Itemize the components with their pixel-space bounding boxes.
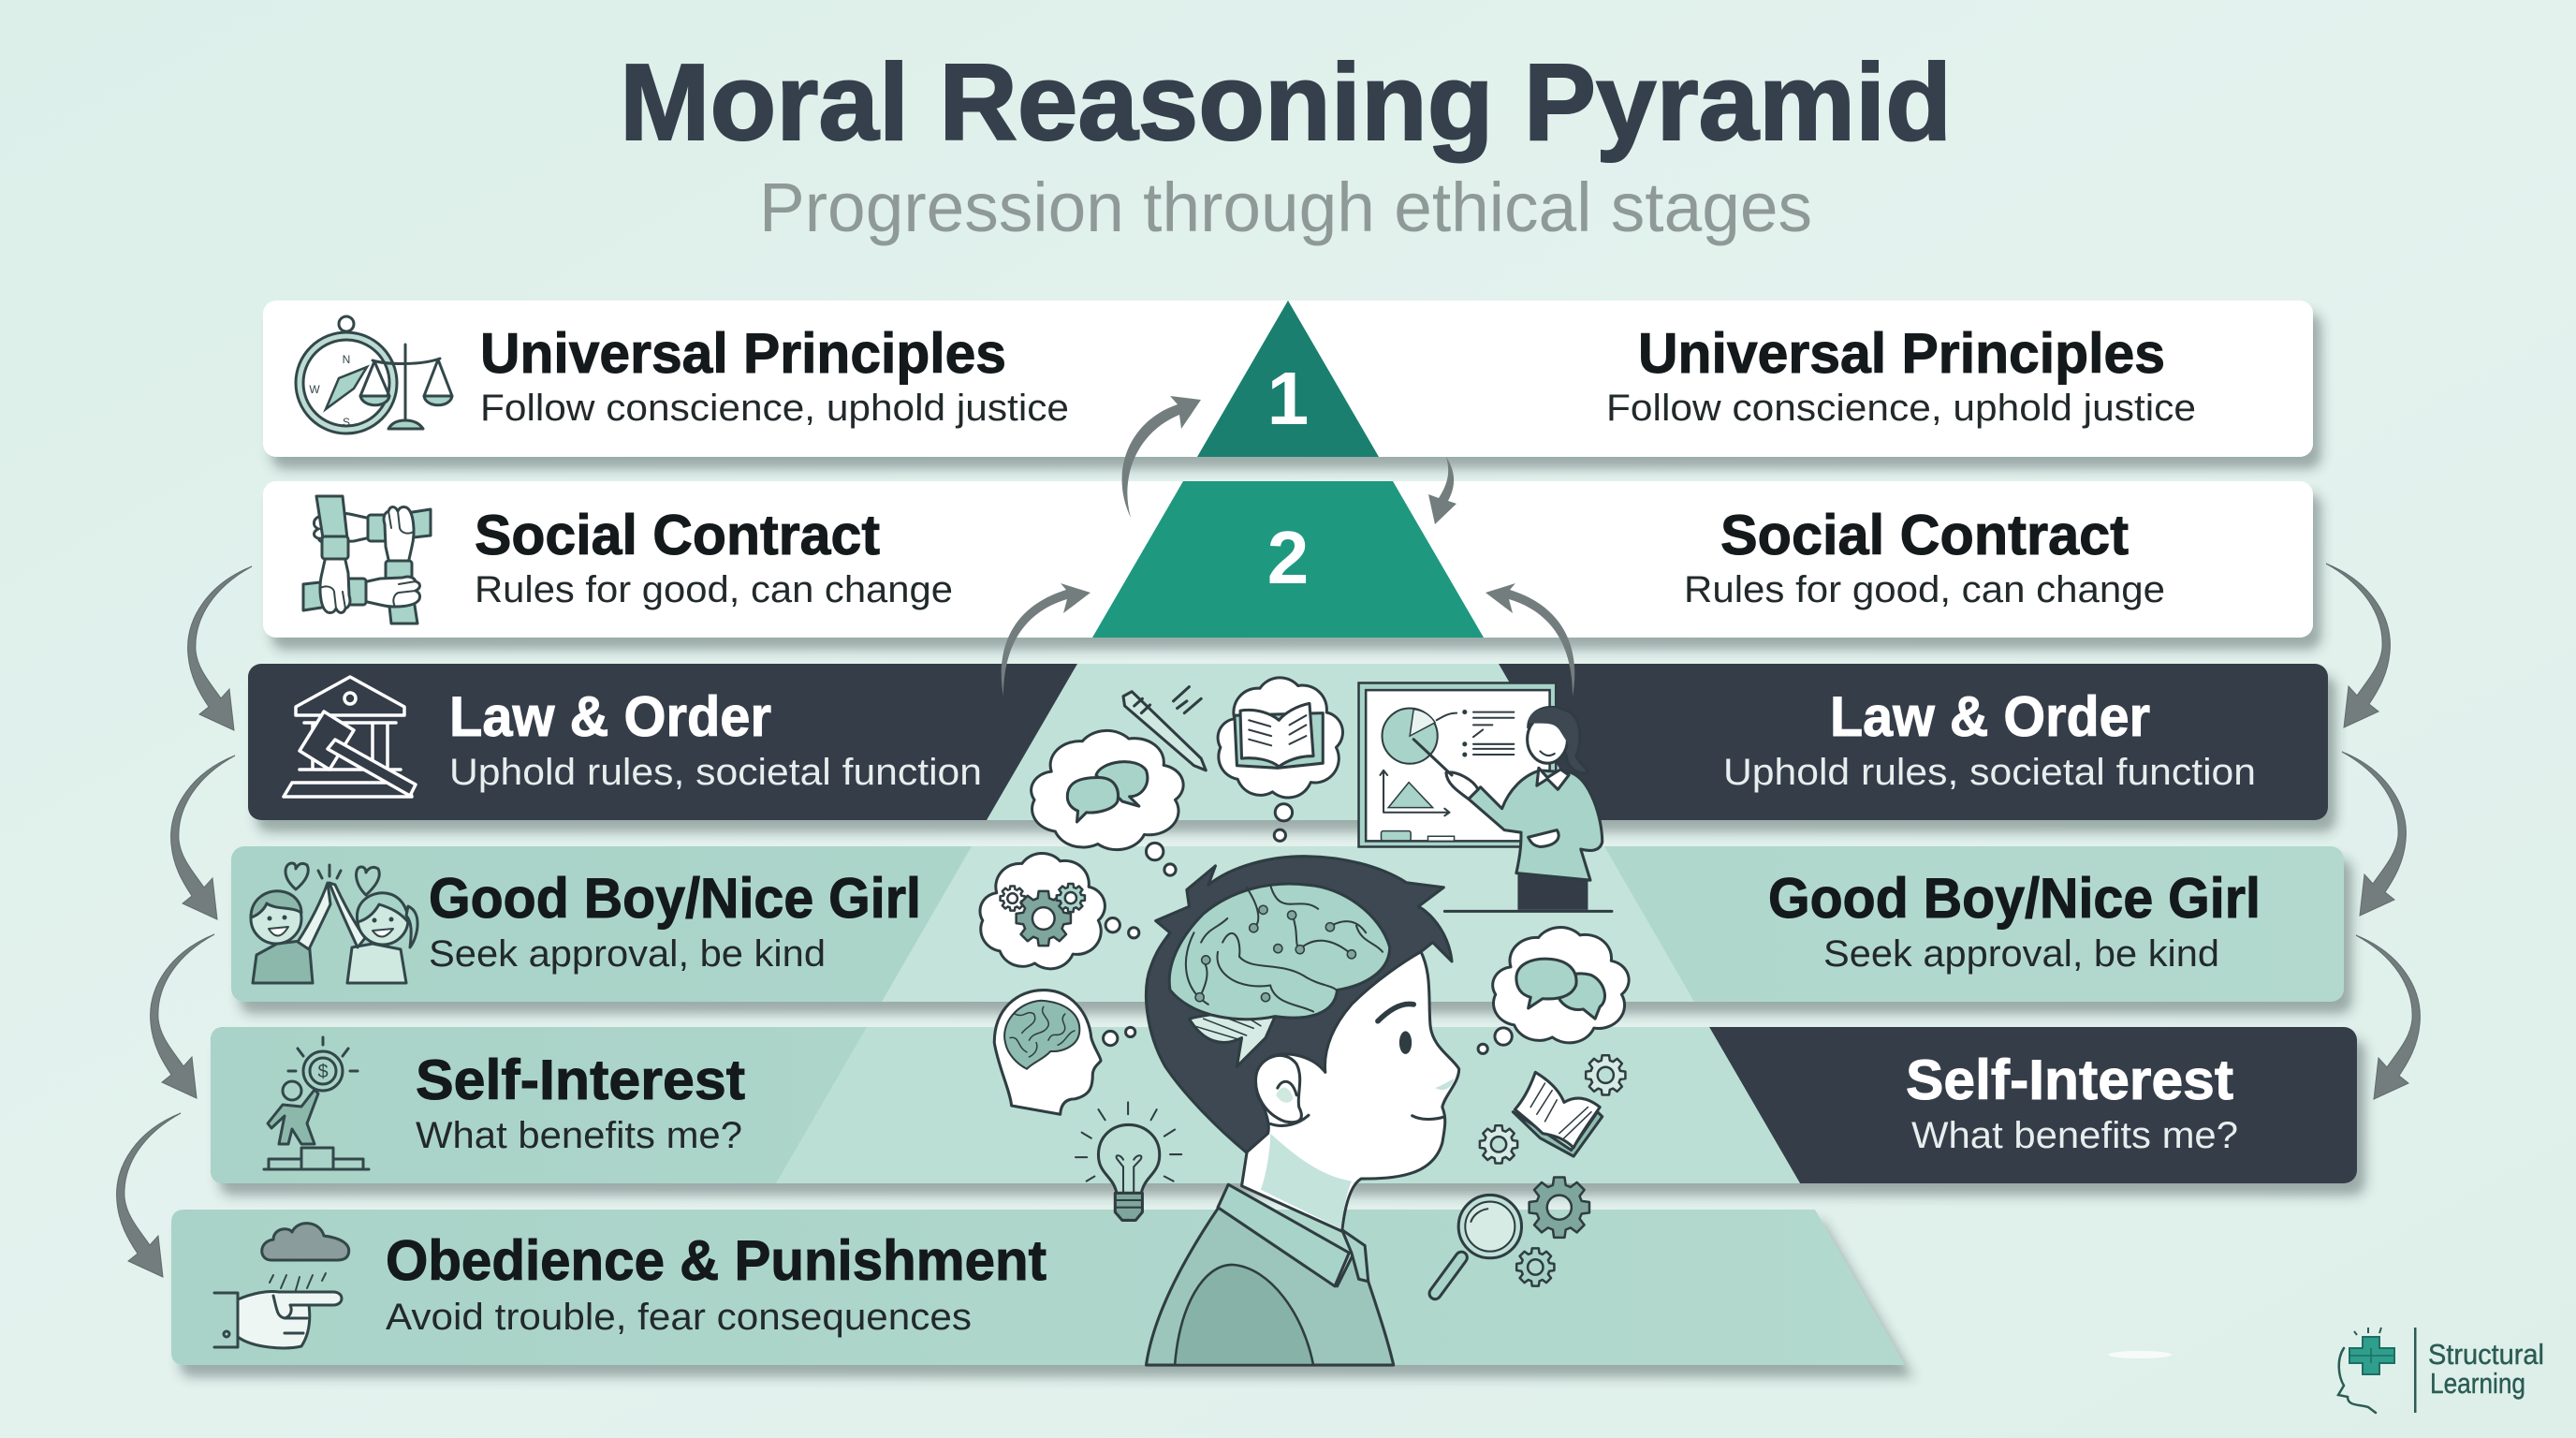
arrow: center up left upper — [1122, 396, 1201, 518]
text: Good Boy/Nice Girl right — [1768, 867, 2261, 975]
text: Law and Order left: Uphold rules, societal function — [449, 752, 982, 793]
stage number 1: 1 — [1267, 357, 1309, 440]
text: Social Contract left — [475, 504, 953, 610]
bar: stage row 3 background — [248, 664, 2328, 820]
arrow: center down right upper — [1428, 457, 1456, 524]
icon: rain cloud and pointing hand — [214, 1224, 349, 1348]
arrow: left 1 — [188, 566, 252, 730]
text: Universal Principles left: Universal Principles — [480, 322, 1006, 385]
whiteboard with charts — [1359, 682, 1556, 846]
text: Obedience and Punishment: Avoid trouble, fear consequences — [386, 1297, 972, 1338]
bar: stage row 1 background — [263, 301, 2313, 457]
icon: compass and scales: W — [309, 383, 320, 396]
text: Self-Interest left: What benefits me? — [416, 1115, 742, 1156]
text: Self-Interest left — [416, 1049, 745, 1156]
arrow: center up right lower — [1486, 583, 1574, 697]
arrow: right 1 — [2326, 564, 2390, 727]
logo: Structural Learning — [2338, 1328, 2544, 1413]
logo: Structural Learning: Structural — [2428, 1338, 2544, 1371]
text: Good Boy/Nice Girl left: Seek approval, be kind — [429, 933, 826, 975]
text: Social Contract left: Rules for good, can change — [475, 569, 953, 610]
text: Self-Interest left: Self-Interest — [416, 1049, 745, 1111]
text: Universal Principles right — [1606, 322, 2196, 429]
subtitle: Progression through ethical stages — [759, 169, 1812, 246]
text: Universal Principles right: Follow conscience, uphold justice — [1606, 388, 2196, 429]
text: Obedience and Punishment — [386, 1229, 1046, 1338]
text: Law and Order right: Law & Order — [1830, 685, 2150, 748]
thought bubble: gears — [980, 853, 1139, 969]
bar: stage row 2 background — [263, 481, 2313, 638]
icon: person reaching for coin: $ — [317, 1062, 329, 1082]
icon: open book — [1513, 1072, 1603, 1156]
logo: Structural Learning: Learning — [2430, 1367, 2525, 1400]
stage number 2: 2 — [1267, 516, 1309, 599]
arrow: right 2 — [2342, 752, 2406, 916]
title: Moral Reasoning Pyramid — [620, 41, 1952, 163]
text: Social Contract right: Rules for good, can change — [1684, 569, 2165, 610]
thought bubble: speech — [1032, 730, 1183, 875]
thought bubble: small head with brain — [994, 990, 1135, 1114]
text: Self-Interest right — [1906, 1049, 2238, 1156]
pyramid tier 2 — [1092, 481, 1484, 638]
bar: stage row 5 background — [211, 1027, 2357, 1183]
text: Universal Principles right: Universal Principles — [1638, 322, 2165, 385]
icon: compass and scales: S — [343, 416, 350, 429]
icon: children high five — [251, 863, 417, 983]
boy head — [1146, 857, 1459, 1231]
text: Social Contract right — [1684, 504, 2165, 610]
boy collar — [1218, 1184, 1368, 1286]
teacher figure — [1413, 707, 1612, 911]
text: Law and Order right — [1723, 685, 2256, 793]
text: Social Contract right: Social Contract — [1720, 504, 2129, 566]
arrow: left 3 — [151, 934, 214, 1098]
pyramid tier 5 — [776, 1027, 1800, 1183]
central illustration: boy, brain and thought bubbles — [980, 678, 1629, 1365]
icon: courthouse and gavel — [284, 677, 416, 797]
icon: pencil — [1123, 687, 1206, 770]
bar: stage row 4 background — [231, 846, 2344, 1002]
arrow: left 4 — [117, 1113, 181, 1277]
arrow: right 3 — [2356, 935, 2420, 1099]
icon: person reaching for coin — [264, 1037, 369, 1169]
text: Social Contract left: Social Contract — [475, 504, 880, 566]
boy shirt — [1146, 1205, 1394, 1365]
text: Good Boy/Nice Girl right: Seek approval, be kind — [1823, 933, 2219, 975]
text: Law and Order left — [449, 685, 982, 793]
text: Universal Principles left: Follow conscience, uphold justice — [480, 388, 1069, 429]
arrow: left 2 — [171, 756, 235, 919]
thought bubble: book — [1218, 678, 1342, 841]
bar: stage row 6 background — [171, 1210, 1905, 1365]
boy brain — [1169, 884, 1390, 1066]
icon: light bulb — [1076, 1102, 1181, 1220]
text: Good Boy/Nice Girl left — [429, 867, 921, 975]
text: Self-Interest right: What benefits me? — [1911, 1115, 2238, 1156]
text: Obedience and Punishment: Obedience & Punishment — [386, 1229, 1046, 1292]
text: Universal Principles left — [480, 322, 1069, 429]
icon: magnifying glass — [1435, 1195, 1522, 1294]
text: Law and Order right: Uphold rules, societal function — [1723, 752, 2256, 793]
text: Self-Interest right: Self-Interest — [1906, 1049, 2233, 1111]
pyramid tier 4 — [882, 846, 1694, 1002]
icon: linked hands — [303, 496, 431, 624]
pyramid tier 3 — [987, 664, 1589, 820]
text: Good Boy/Nice Girl left: Good Boy/Nice Girl — [429, 867, 921, 930]
icon: compass and scales: N — [343, 353, 350, 366]
thought bubble: speech right — [1478, 928, 1629, 1053]
text: Good Boy/Nice Girl right: Good Boy/Nice Girl — [1768, 867, 2261, 930]
white highlight smudge — [2108, 1351, 2172, 1358]
icons: small gears — [1480, 1055, 1625, 1286]
text: Law and Order left: Law & Order — [449, 685, 771, 748]
arrow: center up left lower — [1002, 583, 1090, 697]
pyramid tier 1 — [1197, 301, 1379, 457]
bar: stage row 5 left pale section — [211, 1027, 1800, 1183]
icon: compass and scales — [296, 316, 452, 433]
